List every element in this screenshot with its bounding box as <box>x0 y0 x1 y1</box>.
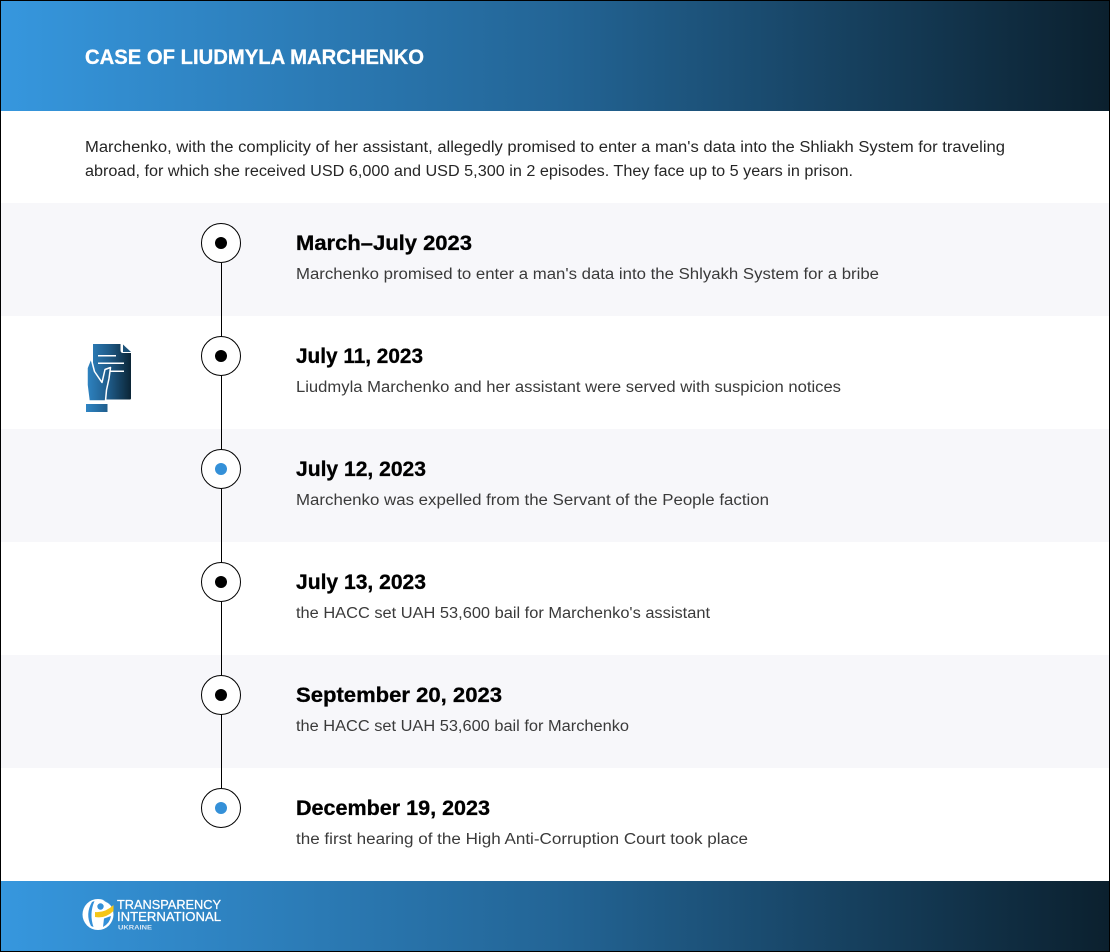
event 1: March–July 2023 <box>296 232 472 255</box>
event 2: July 11, 2023 <box>296 345 423 368</box>
logo: Transparency International Ukraine: UKRAINE <box>118 926 152 932</box>
logo: Transparency International Ukraine: INTERNATIONAL <box>117 909 221 924</box>
timeline marker 3 <box>202 450 240 488</box>
event 2: Liudmyla Marchenko and her assistant were served with suspicion notices <box>296 379 841 396</box>
event 4: the HACC set UAH 53,600 bail for Marchenko's assistant <box>296 605 711 622</box>
timeline marker 1 <box>202 224 240 262</box>
event 5 <box>296 684 629 735</box>
intro text: abroad, for which she received USD 6,000 and USD 5,300 in 2 episodes. They face up to 5 years in prison. <box>85 163 853 180</box>
event 1: Marchenko promised to enter a man's data into the Shlyakh System for a bribe <box>296 266 879 283</box>
row band: September 20, 2023 <box>1 655 1109 768</box>
event 2 <box>296 345 841 396</box>
event 3: Marchenko was expelled from the Servant of the People faction <box>296 492 769 509</box>
timeline connector line <box>220 263 222 788</box>
timeline marker 4 <box>202 562 240 602</box>
event 6: December 19, 2023 <box>296 797 490 820</box>
intro text: Marchenko, with the complicity of her assistant, allegedly promised to enter a man's data into the Shliakh System for traveling <box>85 139 1005 156</box>
row band: July 12, 2023 <box>1 429 1109 542</box>
event 6: the first hearing of the High Anti-Corruption Court took place <box>296 831 748 848</box>
event 5: the HACC set UAH 53,600 bail for Marchenko <box>296 718 629 735</box>
row band: March–July 2023 <box>1 203 1109 316</box>
event 5: September 20, 2023 <box>296 684 502 707</box>
event 6 <box>296 797 748 848</box>
intro text <box>85 139 1005 180</box>
event 1 <box>296 232 879 283</box>
timeline marker 6 <box>202 788 240 828</box>
title: CASE OF LIUDMYLA MARCHENKO <box>85 46 424 69</box>
event 4: July 13, 2023 <box>296 571 426 594</box>
timeline marker 5 <box>202 676 240 714</box>
event 4 <box>296 571 711 622</box>
footer banner <box>1 881 1109 951</box>
event 3: July 12, 2023 <box>296 458 426 481</box>
timeline marker 2 <box>202 336 240 376</box>
header banner <box>1 1 1109 111</box>
icon: hand holding document <box>86 344 131 412</box>
event 3 <box>296 458 769 509</box>
logo: Transparency International Ukraine: TRANSPARENCY <box>117 897 221 912</box>
logo: Transparency International Ukraine <box>82 897 221 932</box>
